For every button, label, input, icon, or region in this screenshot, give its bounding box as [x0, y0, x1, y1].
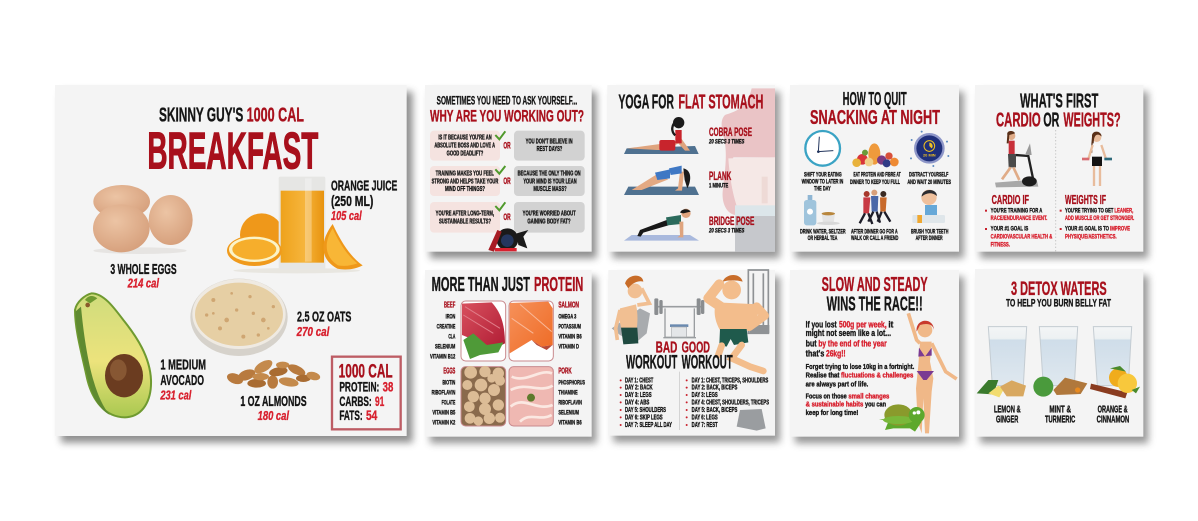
callout: macro totals: 54 [366, 407, 377, 423]
panel: yoga for flat stomach [607, 85, 780, 258]
icon: woman on treadmill [995, 131, 1038, 187]
column: cardio if: CARDIOVASCULAR HEALTH & [991, 233, 1052, 240]
column: weights if: YOUR #1 GOAL IS TO [1065, 226, 1109, 233]
heading: 3 detox waters: TO HELP YOU BURN BELLY FAT [1006, 298, 1111, 310]
panel: how to quit snacking at night [790, 85, 964, 258]
text block: fluctuations: are always part of life. [806, 380, 868, 389]
label: avocado: 231 cal [160, 387, 192, 402]
list: bad workout plan: DAY 3: LEGS [625, 392, 652, 399]
panel: more than just protein [425, 270, 597, 443]
nutrient list: beef [430, 300, 456, 360]
label: avocado [160, 356, 206, 402]
label: eggs: 214 cal [127, 276, 159, 291]
icon: clock [805, 131, 840, 166]
labels: detox water ingredients [994, 405, 1129, 426]
label: avocado: 1 MEDIUM [160, 356, 206, 373]
label: bridge pose: BRIDGE POSE [709, 214, 754, 228]
panel: cardio or weights [975, 85, 1148, 258]
column: weights if: IMPROVE [1110, 226, 1130, 233]
heading: more than just protein: PROTEIN [534, 274, 583, 296]
nutrient list: eggs: VITAMIN K2 [432, 419, 456, 426]
photo: pork [509, 367, 553, 426]
label: orange juice: ORANGE JUICE [331, 178, 397, 195]
figure: muscular man [708, 275, 765, 371]
nutrient list: salmon: SALMON [558, 300, 579, 309]
labels: detox water ingredients: LEMON & [994, 405, 1021, 416]
heading: yoga for flat stomach: FLAT STOMACH [678, 91, 763, 113]
text block: sustainable habits [806, 391, 889, 417]
figure: skinny man [616, 276, 649, 344]
icon: bridge pose [624, 209, 699, 241]
label: oats [296, 309, 351, 339]
comparison row 3: GAINING BODY FAT? [527, 218, 571, 225]
label: orange juice: 105 cal [331, 208, 362, 223]
nutrient list: beef: CLA [448, 333, 455, 340]
heading: how to quit snacking at night: HOW TO QUIT [843, 88, 907, 109]
tip text row 1: EAT PROTEIN AND FIBRE AT [853, 172, 901, 179]
heading: 3 detox waters: 3 DETOX WATERS [1011, 279, 1107, 300]
list: good workout plan: DAY 5: BACK, BICEPS [692, 407, 738, 414]
nutrient list: salmon: VITAMIN D [558, 343, 579, 350]
list: bad workout plan: DAY 6: SKIP LEGS [625, 414, 663, 421]
nutrient list: eggs [432, 367, 456, 426]
comparison row 3: SUSTAINABLE RESULTS? [439, 218, 491, 225]
heading: slow and steady wins the race: SLOW AND STEADY [822, 274, 928, 296]
text block: sustainable habits: Focus on those [806, 391, 847, 400]
nutrient list: pork: PHOSPHORUS [558, 379, 585, 386]
tip text row 2: DRINK WATER, SELTZER [800, 228, 846, 235]
tip text row 2: AFTER DINNER GO FOR A [851, 228, 898, 235]
nutrient list: eggs: BIOTIN [442, 379, 455, 386]
figure: woman in bikini [908, 313, 957, 433]
nutrient list: pork [558, 367, 585, 426]
comparison row 2: BECAUSE THE ONLY THING ON [518, 171, 581, 178]
comparison row 3: YOU'RE AFTER LONG-TERM, [436, 211, 494, 218]
heading: why are you working out: SOMETIMES YOU NEED TO ASK YOURSELF... [437, 93, 577, 107]
column: cardio if: YOU'RE TRAINING FOR A [991, 207, 1042, 214]
label: plank: 1 MINUTE [709, 183, 728, 189]
tip text row 1: DINNER TO KEEP YOU FULL [850, 179, 900, 186]
comparison row 3 [430, 202, 585, 233]
tip text row 1: THE DAY [814, 186, 831, 193]
heading: why are you working out: WHY ARE YOU WORKING OUT? [430, 107, 584, 126]
heading: 3 detox waters [1006, 279, 1111, 310]
nutrient list: eggs: EGGS [443, 367, 456, 376]
column: weights if: LEANER, [1114, 207, 1133, 214]
icon: 20 minute timer [910, 131, 949, 167]
icon: avocado [75, 293, 151, 417]
callout: macro totals: FATS: [339, 407, 363, 423]
label: almonds: 180 cal [258, 408, 289, 423]
label: almonds: 1 OZ ALMONDS [240, 393, 307, 410]
icon: water bottle and tea [804, 195, 840, 225]
list: bad workout plan: DAY 7: SLEEP ALL DAY [625, 422, 672, 429]
labels: detox water ingredients: MINT & [1049, 405, 1071, 416]
labels: detox water ingredients: CINNAMON [1097, 415, 1129, 426]
list: bad workout plan: DAY 2: BACK [625, 385, 653, 392]
list: bad workout plan: DAY 1: CHEST [625, 377, 654, 384]
photo: eggs [461, 366, 506, 426]
callout: macro totals: PROTEIN: [339, 379, 379, 395]
icon: three eggs [93, 185, 193, 254]
nutrient list: beef: BEEF [444, 300, 455, 309]
heading: skinny guy's 1000 cal: 1000 CAL [247, 104, 304, 127]
heading: bad vs good workout: WORKOUT [626, 352, 677, 373]
comparison row 3: YOU'RE WORRIED ABOUT [523, 211, 576, 218]
nutrient list: pork: VITAMIN B6 [558, 419, 582, 426]
comparison row 2: TRAINING MAKES YOU FEEL [436, 171, 494, 178]
text block: sustainable habits: small changes [848, 391, 889, 400]
tip text row 2: BRUSH YOUR TEETH [911, 228, 949, 235]
comparison row 2: STRONG AND HELPS TAKE YOUR [432, 178, 498, 185]
heading: breakfast: BREAKFAST [147, 123, 318, 181]
nutrient list: pork: PORK [558, 367, 572, 376]
icon: weight plates [737, 409, 766, 431]
tip text row 2 [800, 228, 949, 242]
tip text row 1: SHIFT YOUR EATING [804, 172, 842, 179]
heading: slow and steady wins the race: WINS THE RACE!! [827, 294, 923, 316]
text block: sustainable habits: & sustainable habits [806, 400, 863, 409]
label: eggs [110, 261, 177, 291]
labels: detox water ingredients: GINGER [996, 415, 1018, 426]
heading: what's first cardio or weights: CARDIO [996, 110, 1041, 132]
nutrient list: eggs: FOLATE [442, 399, 456, 406]
heading: what's first cardio or weights: WHAT'S FIRST [1020, 89, 1099, 112]
heading: bad vs good workout: GOOD [682, 339, 710, 356]
icon: almonds [225, 357, 321, 389]
icon: fruit [852, 143, 899, 167]
panel: 3 detox waters [975, 269, 1148, 443]
text block: fluctuations: fluctuations & challenges [841, 371, 913, 380]
label: avocado: AVOCADO [160, 372, 204, 389]
heading: what's first cardio or weights: OR [1043, 110, 1060, 132]
tip text row 2: AFTER DINNER [916, 235, 943, 242]
text block: weekly loss: 26kg!! [826, 349, 846, 359]
list: good workout plan: DAY 7: REST [692, 422, 718, 429]
tip text row 2: WALK OR CALL A FRIEND [851, 235, 899, 242]
panel: bad workout vs good workout [608, 270, 780, 442]
icon: bowl of oats [190, 279, 288, 356]
heading: how to quit snacking at night: SNACKING AT NIGHT [810, 106, 940, 129]
callout: macro totals [332, 357, 401, 429]
column: weights if [1060, 193, 1134, 240]
comparison row 2: YOUR MIND IS YOUR LEAN [523, 178, 577, 185]
comparison row 1: GOOD DEADLIFT? [447, 151, 483, 158]
label: cobra pose [708, 125, 752, 145]
nutrient list: pork: SELENIUM [558, 409, 579, 416]
text block: fluctuations: Realise that [806, 371, 840, 380]
panel: slow and steady wins the race [790, 270, 964, 443]
label: cobra pose: 20 SECS 3 TIMES [708, 139, 744, 145]
label: eggs: 3 WHOLE EGGS [110, 261, 177, 278]
column: weights if: WEIGHTS IF [1065, 193, 1106, 207]
comparison row 1: YOU DON'T BELIEVE IN [526, 138, 573, 145]
label: orange juice: (250 ML) [331, 193, 373, 210]
comparison row 1 [430, 131, 585, 161]
label: bridge pose: 20 SECS 3 TIMES [708, 228, 744, 234]
icon: glass with orange and cinnamon [1090, 327, 1140, 398]
icon: orange juice and oranges [227, 177, 363, 273]
comparison row 2: OR [503, 176, 511, 186]
text block: sustainable habits: keep for long time! [806, 408, 858, 417]
nutrient list: pork: THIAMINE [558, 389, 578, 396]
icon: glass with lemon and ginger [977, 327, 1027, 397]
icon: friends walking [860, 190, 890, 224]
list: good workout plan: DAY 6: LEGS [692, 414, 718, 421]
nutrient list: pork: RIBOFLAVIN [558, 399, 582, 406]
list: good workout plan: DAY 3: LEGS [692, 392, 718, 399]
nutrient list: salmon: VITAMIN B6 [558, 333, 582, 340]
nutrient list: eggs: VITAMIN B5 [432, 409, 456, 416]
callout: macro totals: CARBS: [339, 393, 372, 409]
text block: weekly loss [806, 319, 893, 359]
label: bridge pose [708, 214, 754, 234]
background: torso silhouette [722, 88, 775, 252]
tip text row 2: OR HERBAL TEA [808, 235, 838, 242]
panel: why are you working out [425, 85, 597, 258]
text block: weekly loss: that's [806, 349, 824, 359]
heading: what's first cardio or weights [996, 89, 1121, 132]
icon: cobra pose [624, 117, 699, 154]
callout: macro totals: 1000 CAL [339, 362, 393, 383]
nutrient list: beef: IRON [446, 313, 455, 320]
icon: woman with dumbbells [1082, 132, 1112, 186]
heading: yoga for flat stomach: YOGA FOR [618, 91, 674, 113]
text block: weekly loss: If you lost [806, 319, 837, 329]
nutrient list: salmon [558, 300, 582, 350]
label: plank [709, 169, 732, 189]
comparison row 2: MUSCLE MASS? [533, 186, 567, 193]
heading: bad vs good workout [626, 339, 733, 373]
icon: boy brushing teeth [912, 190, 945, 223]
nutrient list: eggs: RIBOFLAVIN [432, 389, 455, 396]
labels: detox water ingredients: TURMERIC [1045, 415, 1075, 426]
text block: fluctuations [806, 362, 914, 389]
heading: what's first cardio or weights: WEIGHTS? [1063, 110, 1121, 132]
column: weights if: PHYSIQUE/AESTHETICS. [1065, 233, 1117, 240]
comparison row 2 [430, 166, 585, 196]
list: bad workout plan [620, 377, 672, 429]
list: good workout plan: DAY 4: CHEST, SHOULDERS, TRICEPS [692, 399, 769, 406]
heading: bad vs good workout: WORKOUT [682, 352, 733, 373]
icon: turtle [879, 404, 925, 432]
label: orange juice [331, 178, 397, 223]
text block: fluctuations: Forget trying to lose 10kg in a fortnight. [806, 362, 914, 371]
column: cardio if [985, 193, 1052, 248]
heading: skinny guy's 1000 cal: SKINNY GUY'S [159, 104, 243, 127]
nutrient list: beef: SELENIUM [435, 343, 456, 350]
list: bad workout plan: DAY 5: SHOULDERS [625, 407, 666, 414]
comparison row 1: IS IT BECAUSE YOU'RE AN [438, 134, 492, 141]
text block: sustainable habits: you can [865, 400, 886, 409]
column: cardio if: CARDIO IF [992, 193, 1029, 207]
list: bad workout plan: DAY 4: ABS [625, 399, 650, 406]
text block: weekly loss: 500g per week, [839, 319, 887, 329]
nutrient list: beef: CREATINE [437, 323, 456, 330]
list: good workout plan [686, 377, 769, 429]
nutrient list: salmon: POTASSIUM [558, 323, 581, 330]
column: weights if: ADD MUSCLE OR GET STRONGER. [1065, 215, 1134, 222]
callout: macro totals: 91 [375, 393, 384, 409]
heading: bad vs good workout: BAD [656, 339, 677, 356]
text block: weekly loss: it [888, 319, 893, 329]
icon: gym equipment [612, 270, 769, 343]
label: cobra pose: COBRA POSE [709, 125, 752, 139]
heading: more than just protein: MORE THAN JUST [432, 274, 530, 296]
tip text row 1: DISTRACT YOURSELF [909, 172, 948, 179]
label: oats: 270 cal [296, 324, 330, 339]
icon: gym gear [488, 228, 528, 252]
label: plank: PLANK [709, 169, 732, 183]
heading: slow and steady wins the race [822, 274, 928, 316]
comparison row 1: ABSOLUTE BOSS AND LOVE A [434, 143, 495, 150]
label: almonds [240, 393, 307, 423]
comparison row 2: MIND OFF THINGS? [445, 186, 485, 193]
heading: how to quit snacking at night [810, 88, 940, 129]
labels: detox water ingredients: ORANGE & [1098, 405, 1128, 416]
icon: glass with mint and turmeric [1033, 327, 1087, 397]
tip text row 1 [802, 172, 951, 193]
list: good workout plan: DAY 1: CHEST, TRICEPS, SHOULDERS [692, 377, 769, 384]
callout: macro totals: 38 [383, 379, 393, 395]
photo: beef [461, 301, 506, 361]
label: oats: 2.5 OZ OATS [297, 309, 351, 326]
comparison row 3: OR [503, 212, 511, 222]
column: cardio if: FITNESS. [991, 241, 1010, 248]
column: weights if: YOU'RE TRYING TO GET [1065, 207, 1113, 214]
comparison row 1: OR [503, 140, 511, 150]
icon: plank pose [624, 166, 699, 195]
photo: salmon [509, 301, 553, 361]
comparison row 1: REST DAYS? [537, 146, 562, 153]
heading: why are you working out [430, 93, 584, 126]
column: cardio if: RACE/ENDURANCE EVENT. [991, 215, 1047, 222]
tip text row 1: AND WAIT 20 MINUTES [907, 179, 951, 186]
icon: 20 minute timer: 20 MIN [923, 154, 936, 158]
text block: weekly loss: might not seem like a lot... [806, 328, 891, 338]
text block: weekly loss: but [806, 339, 817, 349]
list: good workout plan: DAY 2: BACK, BICEPS [692, 385, 738, 392]
nutrient list: salmon: OMEGA 3 [558, 313, 577, 320]
panel: skinny guy's 1000 cal breakfast [55, 85, 413, 443]
tip text row 1: WINDOW TO LATER IN [802, 178, 844, 185]
column: cardio if: YOUR #1 GOAL IS [991, 226, 1029, 233]
nutrient list: beef: VITAMIN B12 [430, 353, 456, 360]
text block: weekly loss: by the end of the year [818, 339, 887, 349]
